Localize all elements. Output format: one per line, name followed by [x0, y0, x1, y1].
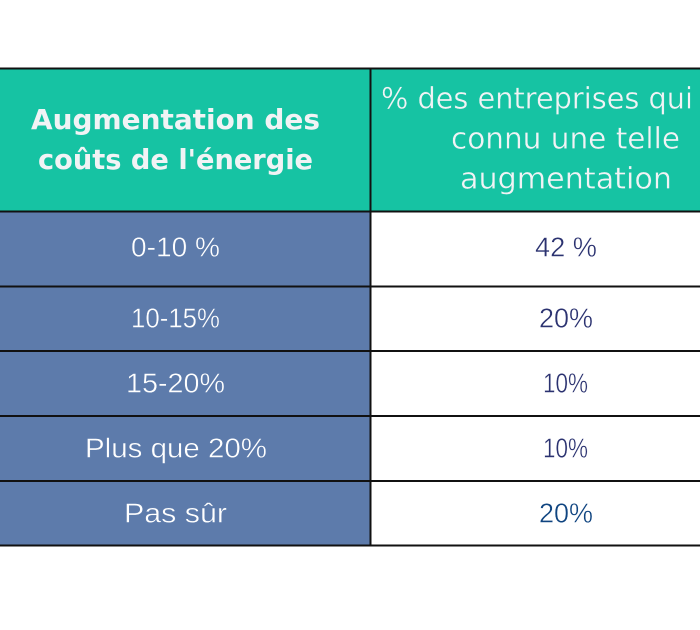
- left column: cost increase ranges: 15-20%: [126, 368, 225, 398]
- right column: share of companies: 42 %: [535, 232, 597, 262]
- left column: cost increase ranges: Plus que 20%: [85, 432, 267, 464]
- right column: share of companies: [371, 212, 700, 546]
- right column: share of companies: 10%: [543, 432, 588, 464]
- heading: left column: coûts de l'énergie: [38, 143, 313, 176]
- left column: cost increase ranges: [0, 212, 371, 546]
- heading: right column: augmentation: [460, 162, 672, 196]
- left column: cost increase ranges: 0-10 %: [131, 232, 220, 262]
- right column: share of companies: 10%: [543, 368, 588, 398]
- right column: share of companies: 20%: [539, 498, 593, 528]
- header row: [0, 68, 700, 212]
- left column: cost increase ranges: Pas sûr: [124, 498, 227, 528]
- heading: left column: Augmentation des: [31, 103, 320, 136]
- heading: right column: connu une telle: [451, 122, 680, 156]
- left column: cost increase ranges: 10-15%: [131, 302, 220, 334]
- heading: right column: % des entreprises qui: [381, 82, 693, 116]
- heading: right column: [381, 82, 693, 196]
- heading: left column: [31, 103, 320, 176]
- right column: share of companies: 20%: [539, 302, 593, 334]
